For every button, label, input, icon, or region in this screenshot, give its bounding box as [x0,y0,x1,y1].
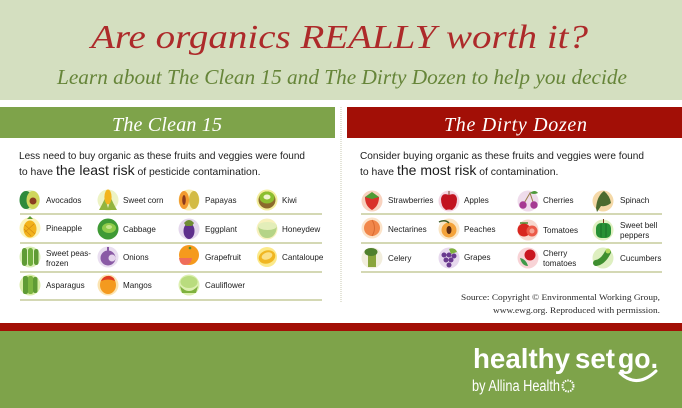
label: sweet corn: Sweet corn [123,196,164,205]
icon: celery [362,248,382,268]
logo: healthy set go: healthy [473,343,570,374]
logo: healthy set go [472,343,658,395]
label: eggplant: Eggplant [205,225,238,234]
label: strawberries: Strawberries [388,196,433,205]
footer [0,323,682,408]
label: nectarines: Nectarines [388,225,427,234]
source note: Source: Copyright © Environmental Working Group, [461,292,660,302]
heading: the clean 15: The Clean 15 [112,114,222,136]
label: sweet peas frozen: frozen [46,259,68,268]
source note [461,292,660,315]
icon: spinach [592,190,614,212]
icon: onion [98,246,118,268]
label: spinach: Spinach [620,196,649,205]
dirty dozen description: to have the most risk of contamination. [360,162,558,178]
label: cherry tomatoes [543,249,576,268]
label: cabbage: Cabbage [123,225,156,234]
source note: www.ewg.org. Reproduced with permission. [493,305,660,315]
label: tomatoes: Tomatoes [543,226,578,235]
icon: apple [438,190,460,212]
label: sweet bell peppers: Sweet bell [620,221,658,230]
label: papayas: Papayas [205,196,236,205]
clean 15 description: Less need to buy organic as these fruits and veggies were found [19,151,305,162]
label: mangos: Mangos [123,281,152,290]
label: sweet peas frozen: Sweet peas- [46,249,91,258]
subtitle: Learn about The Clean 15 and The Dirty Dozen to help you decide [56,65,627,89]
icon: pineapple [20,216,40,238]
label: sweet peas frozen [46,249,91,268]
icon: mango [98,274,118,296]
icon: papaya [178,190,200,210]
dirty dozen description [360,151,644,178]
label: cauliflower: Cauliflower [205,281,245,290]
icon: peach [438,218,460,240]
icon: asparagus [20,274,40,296]
panel: dirty dozen [347,107,682,315]
header band [0,0,682,100]
heading: the clean 15 [0,107,335,138]
label: onions: Onions [123,253,149,262]
icon: cantaloupe [257,247,277,267]
label: sweet bell peppers [620,221,658,240]
label: cherries: Cherries [543,196,574,205]
icon: grapes [438,248,460,268]
label: avocados: Avocados [46,196,81,205]
clean 15 description [19,151,305,178]
label: cucumbers: Cucumbers [620,254,661,263]
title: Are organics REALLY worth it? [89,19,588,56]
icon: sweet corn [98,190,118,210]
label: cherry tomatoes: Cherry [543,249,568,258]
label: apples: Apples [464,196,489,205]
icon: grapefruit [179,245,199,265]
label: cherry tomatoes: tomatoes [543,259,576,268]
label: pineapple: Pineapple [46,224,83,233]
label: kiwi: Kiwi [282,196,297,205]
icon: cucumber [592,248,614,268]
label: grapes: Grapes [464,253,491,262]
heading: the dirty dozen [347,107,682,138]
icon: tomatoes [518,220,538,240]
heading: the dirty dozen: The Dirty Dozen [444,114,587,136]
label: honeydew: Honeydew [282,225,320,234]
icon: cherry tomatoes [518,248,538,268]
icon: avocado [20,190,40,210]
logo: healthy set go: by Allina Health [472,378,560,395]
icon: sweet peas [20,246,40,268]
icon: eggplant [178,218,200,240]
icon: cherries [518,190,538,212]
logo: healthy set go: set [575,343,615,374]
label: sweet bell peppers: peppers [620,231,649,240]
icon: cauliflower [178,274,200,296]
icon: sweet bell pepper [592,219,614,240]
icon: nectarine [362,218,382,238]
label: peaches: Peaches [464,225,496,234]
label: grapefruit: Grapefruit [205,253,242,262]
panel: clean 15 [0,107,335,300]
logo: healthy set go: go. [618,343,658,374]
label: asparagus: Asparagus [46,281,85,290]
clean 15 description: to have the least risk of pesticide contamination. [19,162,260,178]
icon: kiwi [256,190,278,210]
icon: cabbage [98,218,118,240]
dirty dozen description: Consider buying organic as these fruits and veggies were found [360,151,644,162]
label: celery: Celery [388,254,412,263]
label: cantaloupe: Cantaloupe [282,253,324,262]
icon: strawberry [362,190,382,212]
icon: honeydew [256,218,278,240]
